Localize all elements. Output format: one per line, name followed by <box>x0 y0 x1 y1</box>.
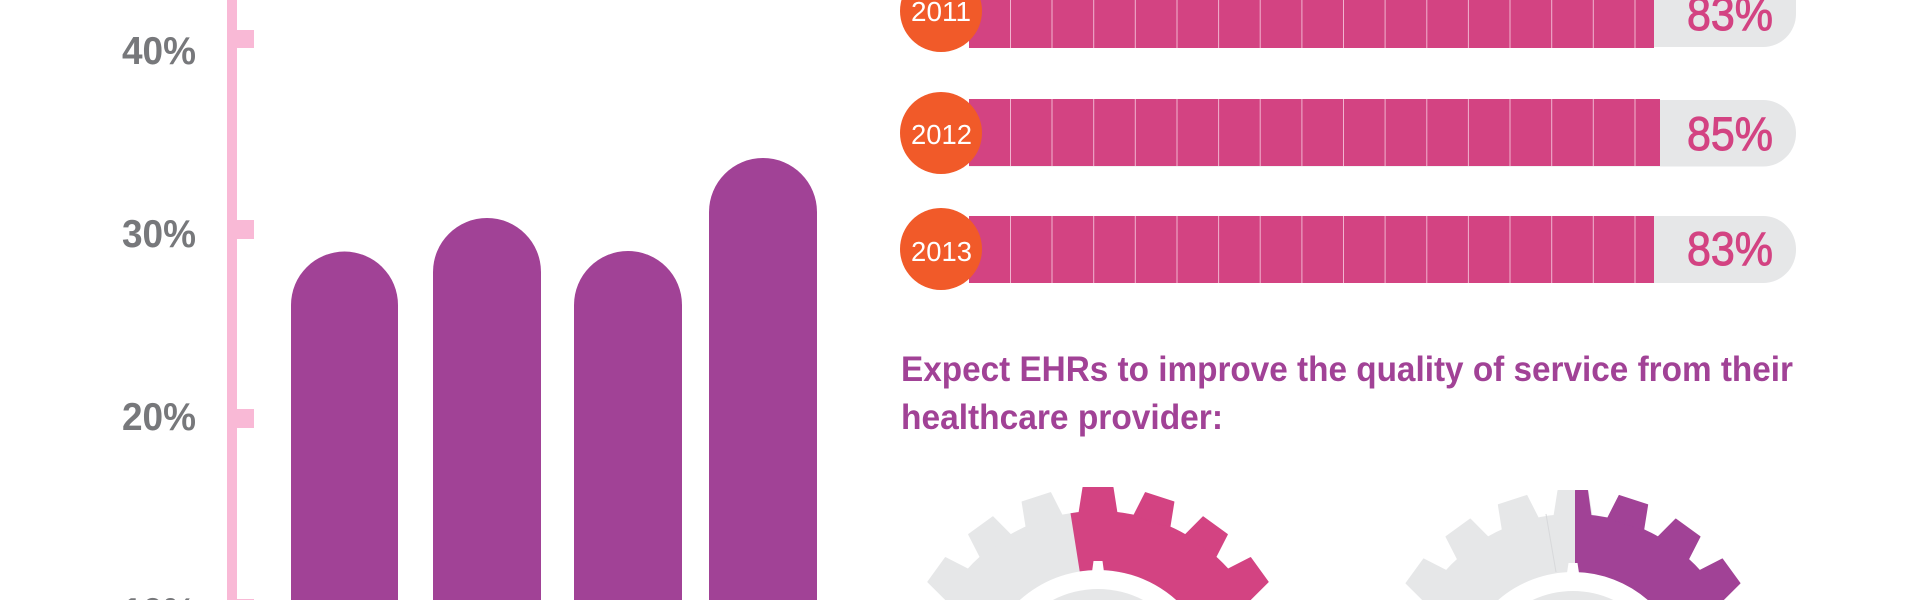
heading: expect EHRs: Expect EHRs to improve the quality of service from their <box>901 350 1793 389</box>
year circle <box>900 0 982 52</box>
notch <box>1092 561 1104 572</box>
row: 2013 <box>900 208 1796 290</box>
gear chart: pink <box>925 488 1271 600</box>
segmented bar 85% <box>969 99 1660 166</box>
heading: expect EHRs: healthcare provider: <box>901 398 1223 437</box>
gear chart: purple <box>1404 490 1742 600</box>
vertical bars <box>291 158 817 600</box>
year circle <box>900 208 982 290</box>
pink teeth <box>1079 488 1271 600</box>
inner disc <box>1533 591 1613 600</box>
row: 2012 <box>900 92 1796 174</box>
value: 85% <box>1687 107 1773 160</box>
y axis labels <box>122 30 196 600</box>
heading: expect EHRs <box>901 350 1793 437</box>
bar chart: vertical percentages <box>122 0 817 600</box>
purple teeth <box>1576 490 1742 600</box>
gray teeth <box>1404 490 1592 600</box>
row: 2011 <box>900 0 1796 52</box>
y axis with tick marks <box>227 0 254 600</box>
notch <box>1567 563 1579 573</box>
segmented bar 83% <box>969 216 1654 283</box>
inner disc <box>1053 589 1143 600</box>
pink value sector <box>1070 511 1251 600</box>
value: 83% <box>1687 222 1773 275</box>
year circle <box>900 92 982 174</box>
year label: 2012 <box>911 119 972 150</box>
purple value sector <box>1575 514 1722 600</box>
y axis labels: 20% <box>122 396 196 439</box>
year label: 2013 <box>911 236 972 267</box>
track <box>969 100 1796 167</box>
segmented bar 83% <box>969 0 1654 48</box>
y axis labels: 30% <box>122 213 196 256</box>
track <box>969 0 1796 47</box>
seam in gray ring <box>1546 514 1556 572</box>
track <box>969 216 1796 283</box>
y axis labels: 40% <box>122 30 196 73</box>
gear ring track <box>945 511 1251 600</box>
gear ring track <box>1424 514 1722 600</box>
gray teeth <box>925 491 1062 600</box>
